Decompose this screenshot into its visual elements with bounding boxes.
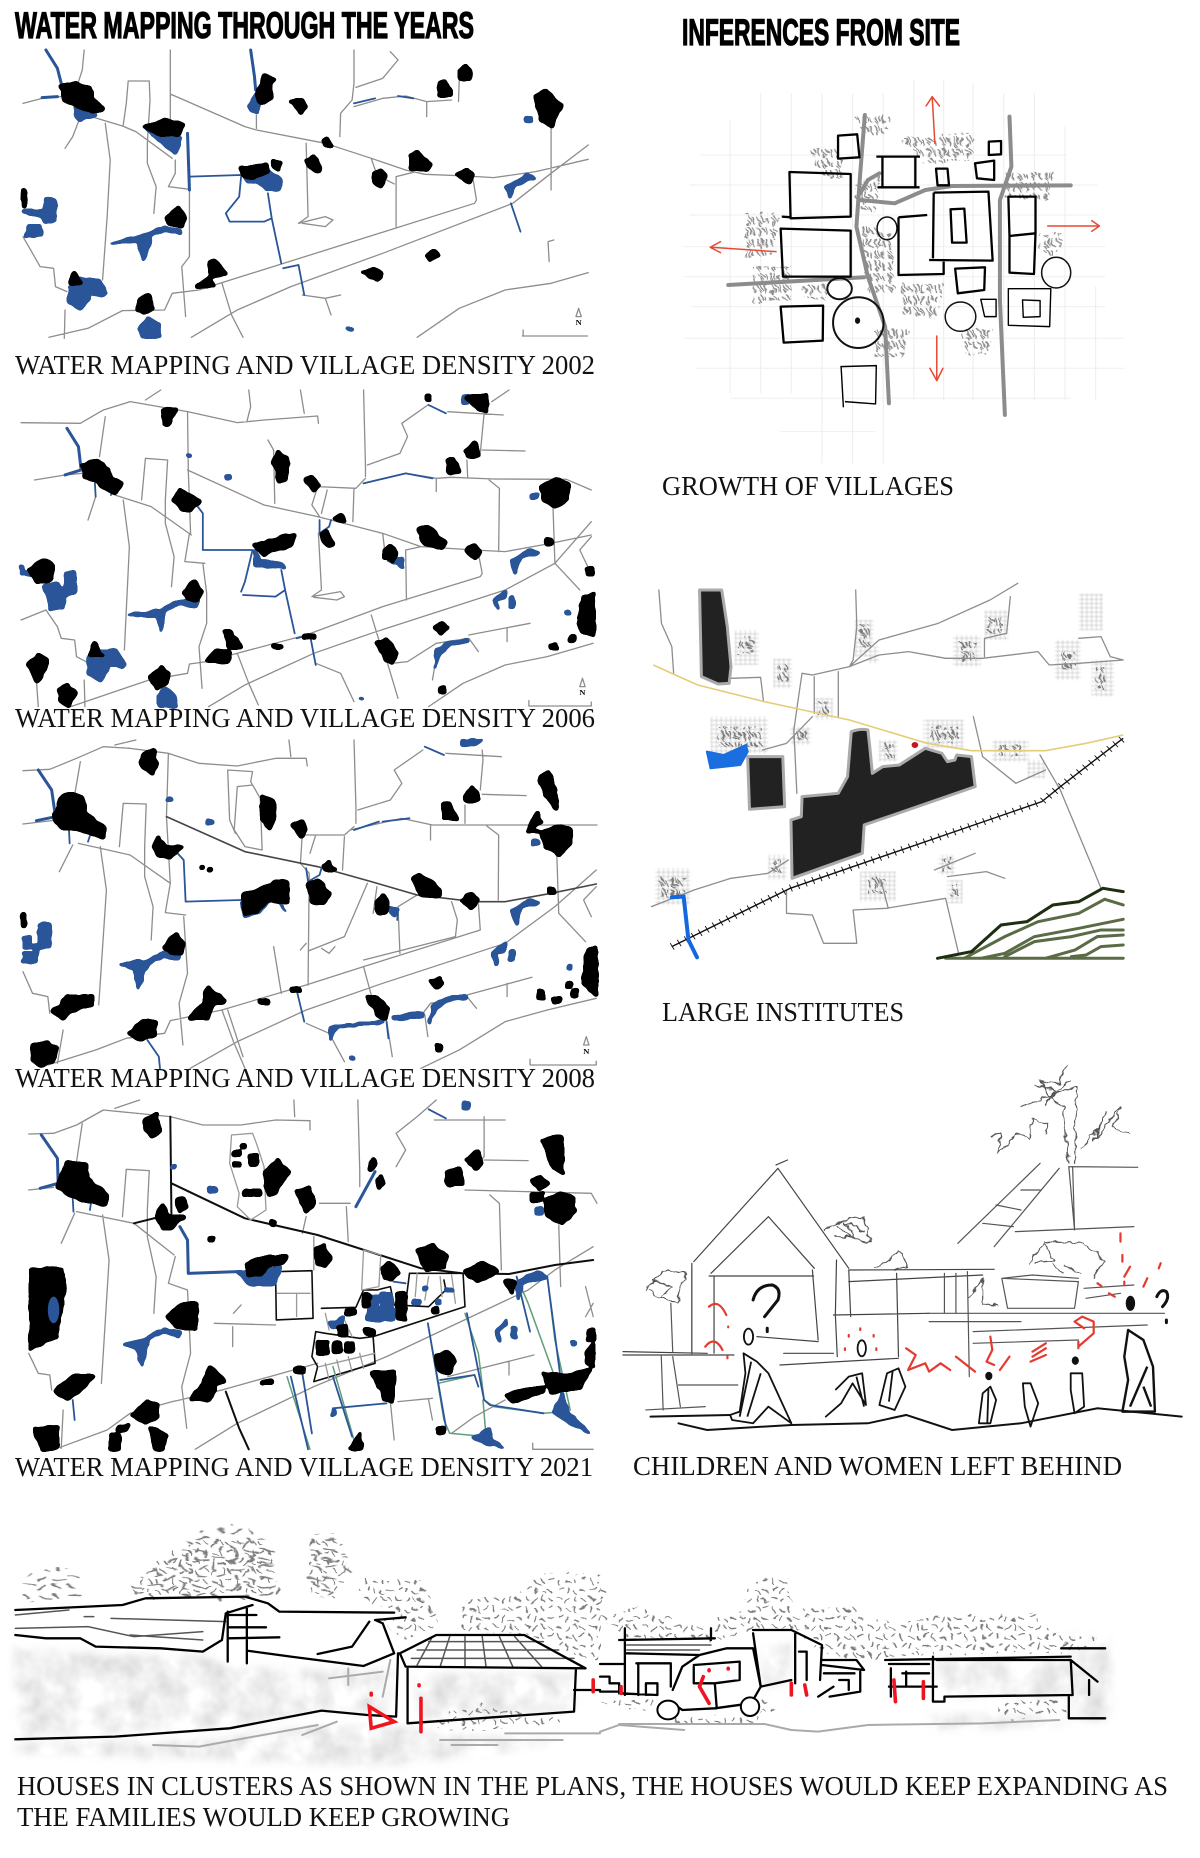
dark scribbles in villages: [661, 617, 1107, 897]
road network: [651, 583, 1123, 953]
water bodies: [23, 740, 571, 1059]
caption: growth of villages: GROWTH OF VILLAGES: [662, 471, 954, 501]
ground wash right: [761, 1633, 1113, 1730]
black lines left: [15, 1597, 600, 1739]
panel: children and women sketch: [623, 1065, 1182, 1430]
caption: 2002: WATER MAPPING AND VILLAGE DENSITY 2002: [15, 350, 595, 380]
main road: [166, 817, 596, 902]
north arrow and scale: [522, 308, 587, 336]
thin water lines: [189, 96, 520, 295]
caption: houses in clusters: HOUSES IN CLUSTERS AS SHOWN IN THE PLANS, THE HOUSES WOULD KEEP EXPANDING AS: [17, 1771, 1168, 1801]
tree-lined green canals: [287, 1277, 589, 1449]
village clusters: [31, 1114, 593, 1450]
caption: houses in clusters: THE FAMILIES WOULD KEEP GROWING: [17, 1802, 510, 1832]
panel: large institutes map: [651, 583, 1123, 958]
foliage left: [130, 1540, 600, 1730]
roads and streams: [23, 50, 588, 338]
red marker: [912, 742, 918, 748]
railway line: [672, 738, 1123, 947]
lake: [707, 745, 748, 768]
north arrow and scale: [530, 1037, 596, 1065]
thin water lines: [95, 405, 446, 665]
grey lines left: [15, 1610, 574, 1667]
roads and streams: [21, 390, 593, 707]
water channels: [40, 1135, 375, 1273]
roads and streams: [29, 1100, 597, 1449]
black main roads: [134, 1117, 593, 1449]
water channels: [65, 428, 81, 475]
north arrow and scale: [529, 678, 591, 706]
caption: 2006: WATER MAPPING AND VILLAGE DENSITY 2006: [15, 703, 595, 733]
heading: inferences from site: INFERENCES FROM SITE: [682, 12, 960, 53]
north arrow and scale: N: [576, 318, 582, 327]
road network: [728, 115, 1071, 415]
panel: water map 2008: [23, 740, 597, 1068]
ground wash left: [15, 1647, 574, 1767]
caption: large institutes: LARGE INSTITUTES: [662, 997, 904, 1027]
pale ground line right: [600, 1720, 1059, 1732]
water bodies: [21, 395, 569, 707]
lines: fences, ladder, shelves: [646, 1163, 1164, 1410]
village texture clusters: [655, 593, 1114, 905]
upper foliage above the left half: [15, 1523, 351, 1602]
caption: 2021: WATER MAPPING AND VILLAGE DENSITY 2021: [15, 1452, 593, 1482]
red marks of worry: [705, 1233, 1161, 1372]
left half of the street: [15, 1540, 600, 1767]
seated and standing figures: [730, 1297, 1155, 1427]
water channels: [36, 770, 55, 821]
water channels: [42, 50, 256, 190]
north arrow and scale: N: [579, 688, 586, 697]
right half of the street: [600, 1577, 1113, 1732]
red people left: [369, 1680, 593, 1732]
roads and streams: [23, 740, 597, 1068]
panel: village street elevation sketch: [15, 1523, 1113, 1767]
pale ground lines left: [153, 1660, 600, 1747]
blue stream: [672, 897, 697, 957]
grey lines right: [627, 1645, 711, 1650]
foliage scribbles: [745, 117, 1065, 357]
hills: [937, 888, 1123, 958]
ground line: [651, 1408, 1182, 1430]
black question marks: [753, 1285, 1168, 1332]
main highway: [653, 665, 1123, 751]
panel: water map 2021: [29, 1100, 597, 1450]
faint grid: [684, 80, 1124, 463]
water bodies: [23, 92, 535, 337]
village clusters: [23, 66, 561, 313]
scale bar: [533, 1443, 593, 1449]
auto-rickshaw wheels: [657, 1697, 759, 1719]
house structure lines: [623, 1160, 994, 1365]
village clusters: [23, 750, 596, 1065]
panel: water map 2002: [23, 50, 588, 338]
building plots: [781, 134, 1051, 407]
water bodies: [122, 1102, 589, 1448]
caption: 2008: WATER MAPPING AND VILLAGE DENSITY 2008: [15, 1063, 595, 1093]
red growth arrows: [710, 97, 1099, 381]
institute paths: [230, 1133, 455, 1380]
village clusters: [27, 395, 593, 705]
caption: children and women left behind: CHILDREN AND WOMEN LEFT BEHIND: [633, 1451, 1122, 1481]
caption: houses in clusters: [17, 1771, 1168, 1832]
panel: water map 2006: [21, 390, 593, 707]
thin water lines: [73, 1109, 563, 1449]
heading: water mapping through the years: WATER MAPPING THROUGH THE YEARS: [15, 5, 474, 46]
thin water lines: [69, 747, 444, 1068]
large institute campuses: [700, 590, 975, 878]
red people right: [621, 1668, 923, 1703]
wells and ponds: [827, 217, 1071, 348]
foliage right: [600, 1577, 1101, 1723]
black lines right: [600, 1628, 1105, 1718]
blue pond inside black cluster: [48, 1297, 59, 1323]
north arrow and scale: N: [583, 1047, 590, 1056]
tree and foliage scribbles: [646, 1065, 1128, 1307]
panel: growth of villages sketch: [684, 80, 1124, 463]
institute outlines: [276, 1271, 465, 1382]
